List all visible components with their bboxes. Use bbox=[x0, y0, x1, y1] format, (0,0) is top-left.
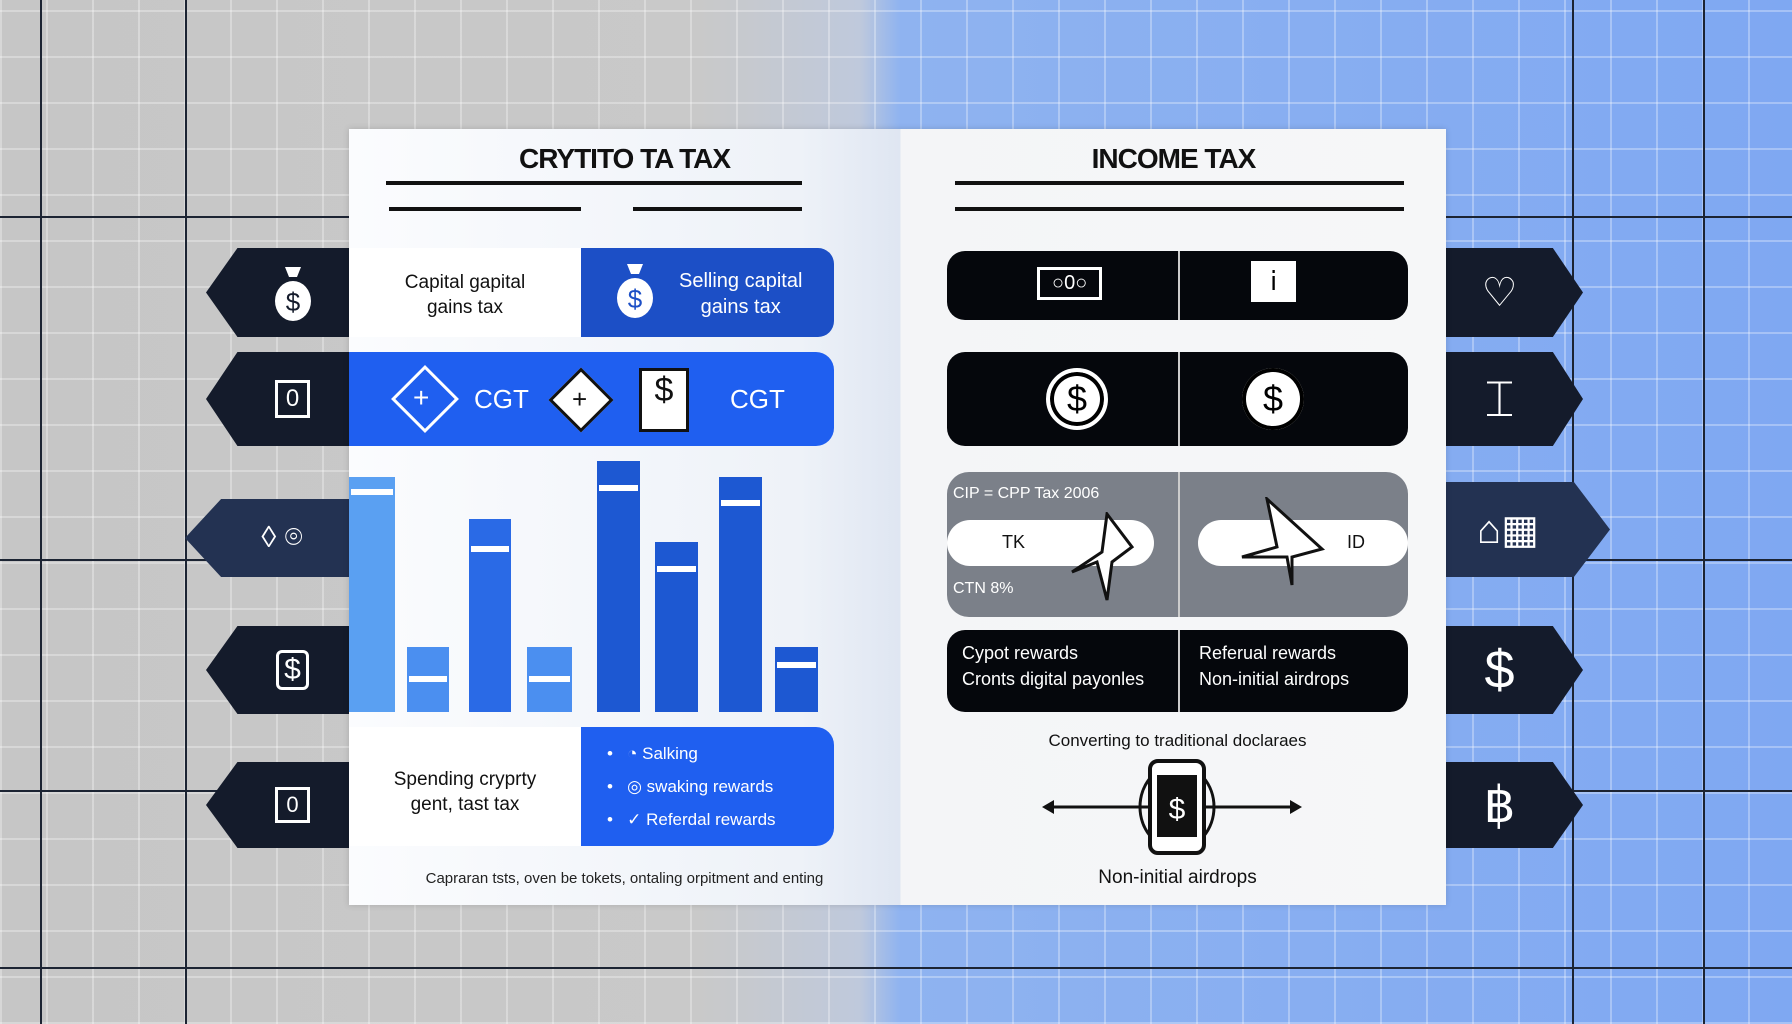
right row 3: gray: CIP = CPP Tax 2006 bbox=[953, 485, 1099, 502]
right row 3: gray: TK bbox=[1002, 532, 1025, 552]
converting text: Converting to traditional doclaraes bbox=[1048, 731, 1306, 750]
tab icon: location pins bbox=[185, 499, 349, 577]
tab icon: bar: ⌶ bbox=[1484, 370, 1514, 426]
tab icon: baht bbox=[1446, 762, 1583, 848]
tab icon: money bag: $ bbox=[285, 286, 300, 316]
tab icon: baht: ฿ bbox=[1484, 777, 1515, 833]
right title: INCOME TAX bbox=[1092, 143, 1255, 174]
tab icon: dollar: $ bbox=[1484, 640, 1515, 700]
tab icon: banknote bbox=[206, 352, 349, 446]
star icons bbox=[1071, 512, 1134, 600]
tab icon: dollar bbox=[1446, 626, 1583, 714]
bottom caption right: Non-initial airdrops bbox=[1098, 867, 1257, 888]
tab icon: banknote: 0 bbox=[286, 385, 299, 412]
left bottom row: spending: • ✓ Referdal rewards bbox=[607, 810, 776, 829]
left row 2: CGT band: CGT bbox=[474, 384, 529, 414]
left bottom row: spending: • ◔ Salking bbox=[607, 744, 698, 763]
right row 4 bbox=[947, 630, 1408, 712]
tab icon: banknote 2 bbox=[206, 762, 349, 848]
left bottom row: spending: gent, tast tax bbox=[411, 794, 519, 815]
right row 2 bbox=[947, 352, 1408, 446]
main panel bbox=[349, 129, 1446, 905]
tab icon: dollar tag: $ bbox=[284, 653, 301, 686]
left row 2: CGT band: + bbox=[572, 384, 587, 414]
left row 1: capital gains: Capital gapital bbox=[405, 272, 525, 293]
left bottom row: spending: • ◎ swaking rewards bbox=[607, 777, 773, 796]
left row 2: CGT band: + bbox=[413, 382, 429, 413]
right row 3: gray bbox=[947, 472, 1408, 617]
tab icon: house: ⌂▦ bbox=[1477, 508, 1539, 552]
footer text left: Capraran tsts, oven be tokets, ontaling orpitment and enting bbox=[426, 870, 823, 887]
left row 1: capital gains: gains tax bbox=[427, 297, 503, 318]
right row 4: Non-initial airdrops bbox=[1199, 669, 1349, 689]
tab icon: heart bbox=[1446, 248, 1583, 337]
blue cell selling bbox=[581, 248, 834, 337]
bar chart bbox=[349, 461, 818, 712]
right row 1: ⅰ bbox=[1270, 266, 1277, 296]
left row 1: capital gains bbox=[405, 248, 834, 337]
left row 1: capital gains: $ bbox=[628, 284, 643, 314]
right side tabs bbox=[1446, 248, 1610, 848]
right row 1 bbox=[947, 251, 1408, 320]
tab icon: heart: ♡ bbox=[1482, 270, 1517, 314]
right row 4: Referual rewards bbox=[1199, 643, 1336, 663]
left side tabs bbox=[185, 248, 349, 848]
list bbox=[581, 727, 834, 846]
tab icon: house bbox=[1446, 482, 1610, 577]
left title: CRYTITO TA TAX bbox=[519, 143, 730, 174]
tab icon: money bag bbox=[206, 248, 349, 337]
right row 2: $ bbox=[1067, 378, 1087, 419]
tab icon: banknote 2: 0 bbox=[286, 792, 299, 817]
right row 4: Cronts digital payonles bbox=[962, 669, 1144, 689]
phone with arrows: $ bbox=[1169, 793, 1186, 826]
left row 2: CGT band: $ bbox=[655, 371, 673, 409]
left bottom row: spending bbox=[394, 727, 834, 846]
tab icon: dollar tag bbox=[206, 626, 349, 714]
phone with arrows bbox=[1042, 759, 1302, 855]
left row 2: CGT band bbox=[349, 352, 834, 446]
tab icon: location pins: ◊ ⌾ bbox=[261, 521, 303, 554]
right row 1: ○0○ bbox=[1052, 272, 1087, 294]
right row 2: $ bbox=[1263, 378, 1283, 419]
left row 1: capital gains: gains tax bbox=[701, 296, 781, 318]
left row 2: CGT band: CGT bbox=[730, 384, 785, 414]
left bottom row: spending: Spending cryprty bbox=[394, 769, 536, 790]
right row 3: gray: ID bbox=[1347, 532, 1365, 552]
left row 1: capital gains: Selling capital bbox=[679, 270, 802, 292]
right row 4: Cypot rewards bbox=[962, 643, 1078, 663]
right row 3: gray: CTN 8% bbox=[953, 580, 1013, 597]
tab icon: bar bbox=[1446, 352, 1583, 446]
